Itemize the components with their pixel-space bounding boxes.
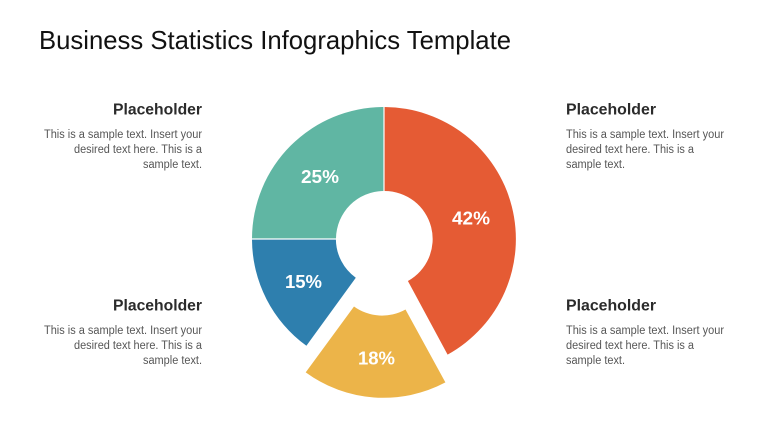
title: Business Statistics Infographics Template [39,25,511,55]
text block: bottom left: Placeholder [113,298,202,314]
text block: top left: Placeholder [113,102,202,118]
segment: 18% yellow, exploded: 18% [358,348,395,368]
segment: 18% yellow, exploded [306,306,445,398]
text block: top left: This is a sample text. Insert your [44,129,202,141]
text block: bottom right: Placeholder [566,298,656,314]
text block: bottom left: sample text. [143,355,202,367]
text block: bottom left [44,298,203,367]
segment: 25% teal [252,107,383,238]
text block: top left [44,102,203,171]
text block: top right: Placeholder [566,102,656,118]
text block: top right: sample text. [566,159,625,171]
segment: 42% orange: 42% [452,208,490,228]
text block: bottom left: This is a sample text. Insert your [44,325,202,337]
text block: bottom right: desired text here. This is a [566,340,695,352]
text block: top left: sample text. [143,159,202,171]
text block: bottom right: sample text. [566,355,625,367]
segment: 42% orange [385,107,516,355]
segment: 15% blue [252,240,356,346]
text block: top right: desired text here. This is a [566,144,695,156]
text block: bottom right [566,298,724,367]
segment: 25% teal: 25% [301,167,339,187]
text block: top right: This is a sample text. Insert your [566,129,724,141]
text block: top right [566,102,724,171]
donut chart [252,107,516,398]
text block: bottom right: This is a sample text. Insert your [566,325,724,337]
segment: 15% blue: 15% [285,272,322,292]
text block: top left: desired text here. This is a [74,144,203,156]
text block: bottom left: desired text here. This is a [74,340,203,352]
